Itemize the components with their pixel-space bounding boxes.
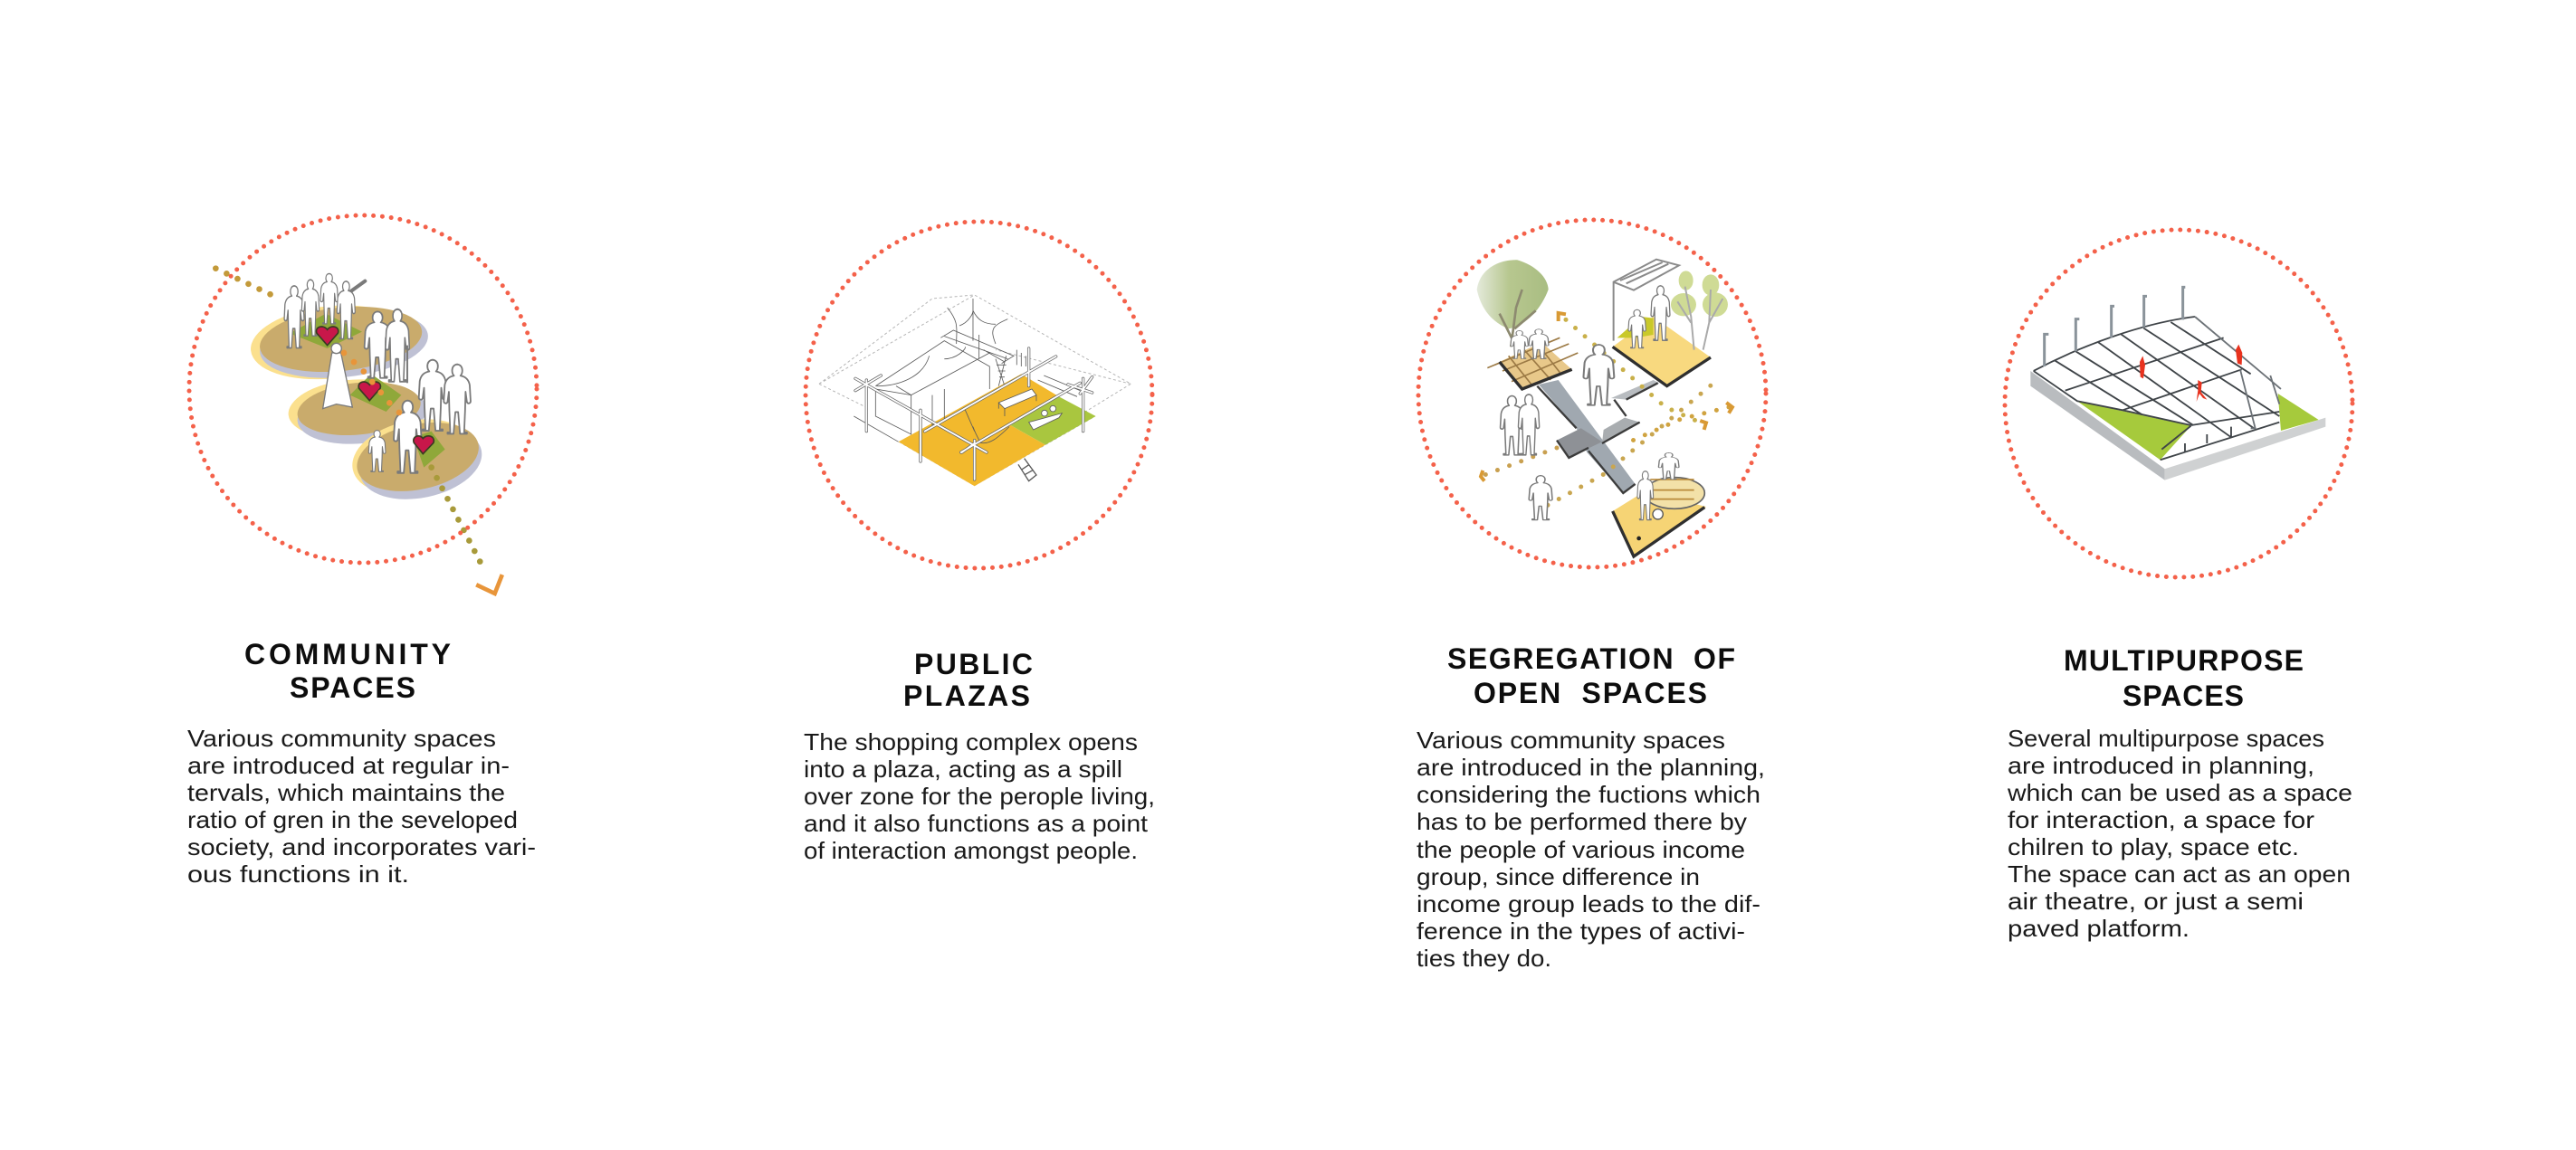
illustration: slender trees [1671,271,1728,350]
heading: public plazas: PLAZAS [903,680,1030,712]
text block: community spaces [187,725,536,888]
heading: segregation of open spaces: SEGREGATION OF [1447,642,1735,675]
text block: multipurpose spaces: which can be used as a space [2007,779,2352,806]
text block: public plazas: into a plaza, acting as a spill [804,756,1122,783]
illustration: upper plaza [1613,260,1711,386]
illustration: green wedges [2077,394,2319,460]
icon: red figures [2140,345,2242,402]
arrow: dotted path with arrowhead [215,269,501,594]
illustration: community spaces [215,269,501,594]
text block: multipurpose spaces: for interaction, a space for [2008,806,2314,833]
dotted ring [189,215,537,563]
text block: public plazas: The shopping complex opens [804,728,1138,756]
illustration: bamboo pole outlines [855,348,1092,480]
heading: segregation of open spaces [1447,642,1735,709]
text block: multipurpose spaces: The space can act as an open [2008,860,2351,888]
text block: segregation of open spaces: the people of various income [1417,836,1745,863]
illustration: green mats [290,314,445,468]
text block: segregation of open spaces: has to be performed there by [1417,808,1747,835]
text block: public plazas: and it also functions as a point [804,810,1149,837]
panel: multipurpose spaces [2005,230,2352,942]
illustration: green lawn [1011,396,1096,445]
text block: community spaces: ratio of gren in the seveloped [187,806,518,833]
text block: multipurpose spaces: are introduced in planning, [2008,752,2314,779]
text block: multipurpose spaces: chilren to play, space etc. [2008,833,2299,860]
illustration: grey walkway [1537,380,1659,493]
text block: community spaces: tervals, which maintains the [187,779,505,806]
text block: multipurpose spaces [2007,725,2352,942]
illustration: bamboo poles [855,348,1092,480]
text block: multipurpose spaces: Several multipurpose spaces [2008,725,2324,752]
heading: multipurpose spaces [2064,644,2304,712]
text block: segregation of open spaces [1417,727,1765,972]
heading: public plazas [903,648,1033,712]
text block: community spaces: Various community spaces [187,725,496,752]
illustration: segregated spaces [1477,260,1732,556]
text block: community spaces: society, and incorporates vari- [187,833,536,860]
heading: multipurpose spaces: MULTIPURPOSE [2064,644,2304,677]
illustration: multipurpose platform [2030,287,2325,480]
illustration: light poles [2045,287,2185,366]
text block: public plazas: over zone for the perople living, [804,783,1155,810]
panel: public plazas [804,222,1155,864]
illustration: slab sides [2030,371,2325,480]
panel: community spaces [187,215,537,888]
dotted ring [806,222,1152,568]
illustration: people [1501,286,1679,520]
illustration: dotted movement arrows [1481,313,1732,505]
dotted ring [2005,230,2352,577]
text block: multipurpose spaces: air theatre, or just a semi [2008,888,2304,915]
heading: community spaces: COMMUNITY [244,638,451,670]
heading: community spaces [244,638,451,704]
illustration: tree [1477,260,1549,347]
illustration: island ellipses [247,298,489,509]
illustration: yellow plaza floor [899,374,1059,486]
panel: segregation of open spaces [1417,220,1766,972]
illustration: dashed canopy outline [819,295,1131,486]
illustration: grid frame [2034,317,2281,460]
text block: public plazas [804,728,1155,864]
illustration: structure frame [854,299,1080,481]
dotted ring [1418,220,1766,567]
illustration: timber deck [1487,337,1578,389]
text block: segregation of open spaces: income group leads to the dif- [1417,890,1760,917]
text block: community spaces: are introduced at regular in- [187,752,510,779]
heading: multipurpose spaces: SPACES [2123,680,2244,712]
heading: segregation of open spaces: OPEN SPACES [1474,677,1707,709]
text block: segregation of open spaces: ference in the types of activi- [1417,917,1745,945]
heading: community spaces: SPACES [290,671,415,704]
text block: segregation of open spaces: considering the fuctions which [1417,781,1760,808]
illustration: plaza axonometric [819,295,1131,486]
text block: public plazas: of interaction amongst people. [804,837,1138,864]
illustration: lower plaza [1613,478,1706,556]
text block: segregation of open spaces: are introduced in the planning, [1417,754,1765,781]
illustration: people silhouettes [284,273,471,473]
text block: segregation of open spaces: Various community spaces [1417,727,1725,754]
text block: multipurpose spaces: paved platform. [2008,915,2190,942]
icon: hearts [317,327,434,454]
heading: public plazas: PUBLIC [914,648,1033,680]
text block: community spaces: ous functions in it. [187,860,409,888]
text block: segregation of open spaces: group, since difference in [1417,863,1700,890]
text block: segregation of open spaces: ties they do. [1417,945,1551,972]
